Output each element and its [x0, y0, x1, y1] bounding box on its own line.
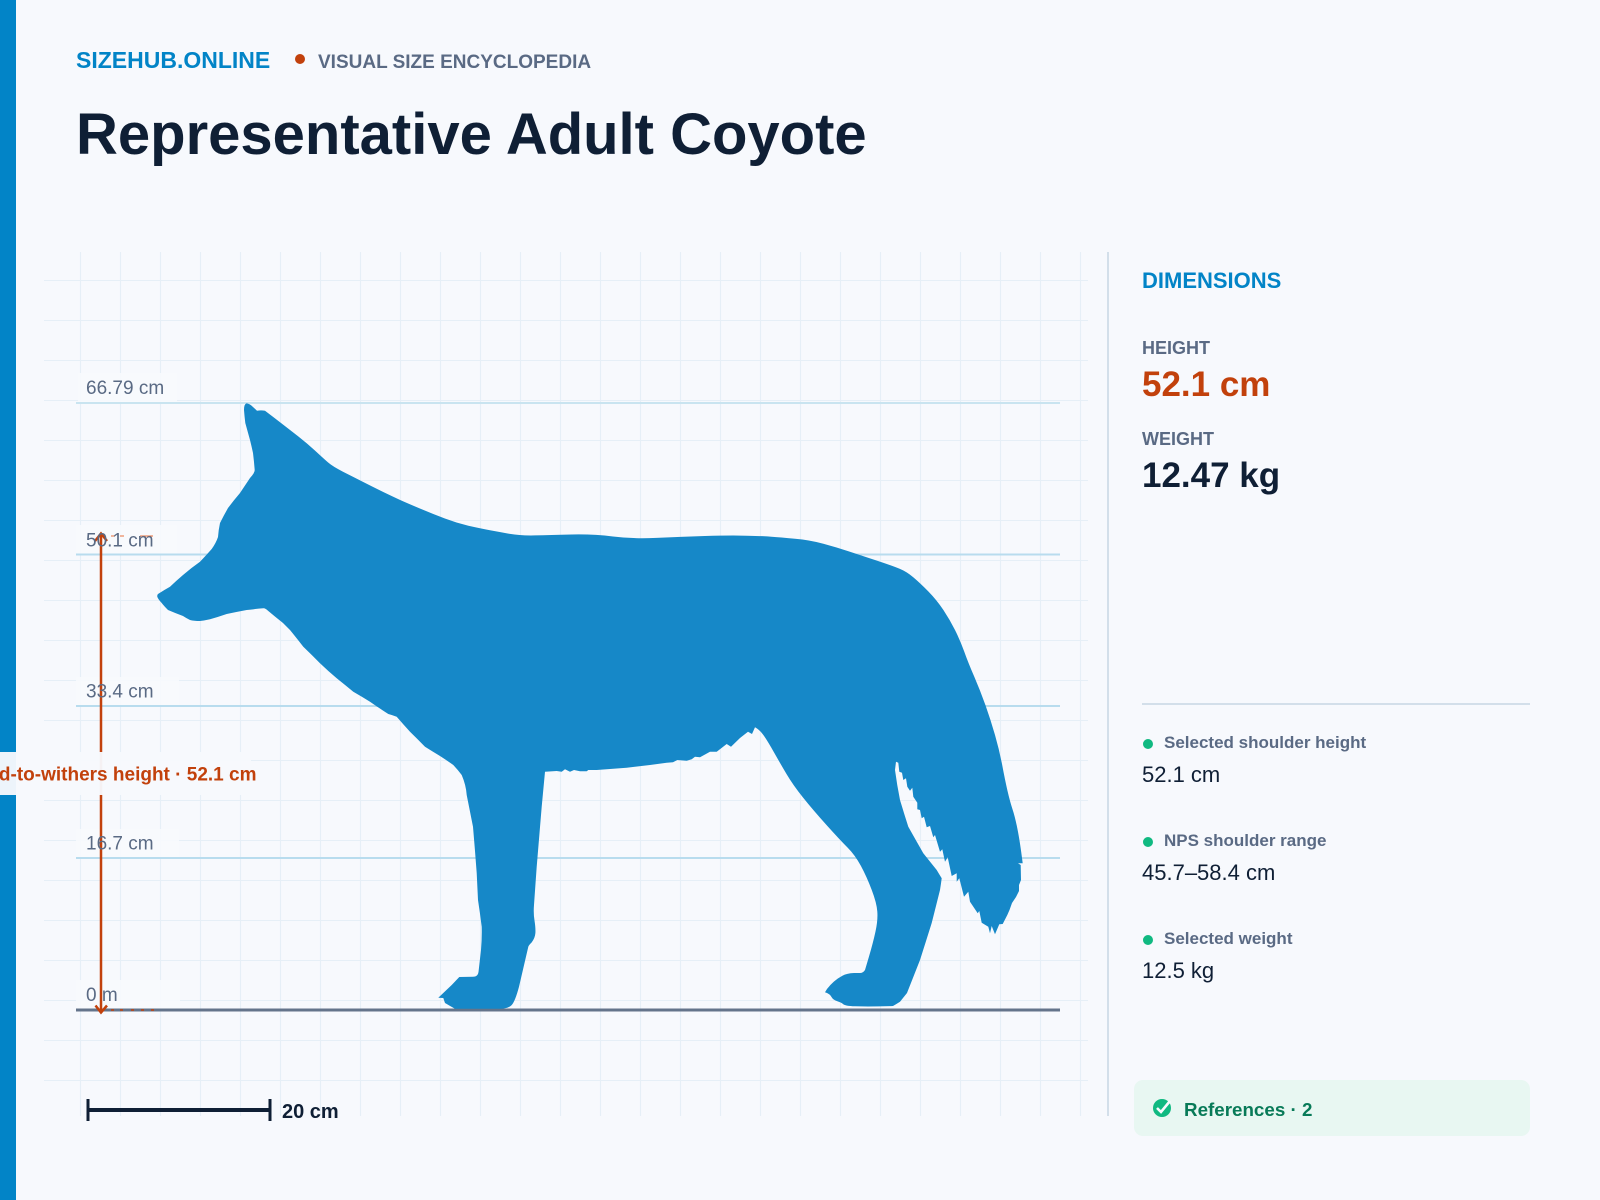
source: selected shoulder height: [1142, 733, 1366, 787]
brand separator dot: [295, 54, 305, 64]
weight metric: [1142, 429, 1280, 495]
chart: coyote size against height scale: [0, 252, 1088, 1123]
panel heading: DIMENSIONS: [1142, 268, 1281, 293]
weight metric: 12.47 kg: [1142, 456, 1280, 495]
icon: check circle: [1153, 1099, 1171, 1117]
scale bar 20 cm: [88, 1099, 339, 1123]
brand name: SIZEHUB.ONLINE: [76, 47, 270, 73]
height metric: 52.1 cm: [1142, 365, 1270, 404]
scale label 0 m: 0 m: [86, 985, 118, 1006]
height metric: HEIGHT: [1142, 338, 1210, 358]
source: selected shoulder height: 52.1 cm: [1142, 762, 1220, 787]
scale label 16.7 cm: 16.7 cm: [86, 834, 154, 854]
height measurement arrow: [95, 534, 107, 1012]
scale label 50.1 cm: 50.1 cm: [86, 530, 154, 552]
panel: dimensions: [1142, 268, 1530, 983]
source: selected weight: [1142, 929, 1293, 983]
tagline: VISUAL SIZE ENCYCLOPEDIA: [318, 52, 591, 73]
coyote silhouette: [157, 403, 1023, 1009]
source: NPS shoulder range: [1142, 831, 1326, 885]
source: selected shoulder height: Selected shoulder height: [1164, 733, 1366, 752]
height callout: [0, 752, 256, 795]
red reference dashes: [111, 535, 153, 537]
panel divider: [1107, 252, 1109, 1116]
source: selected weight: 12.5 kg: [1142, 958, 1214, 983]
references badge: [1134, 1080, 1530, 1136]
height metric: [1142, 338, 1270, 404]
source: NPS shoulder range: NPS shoulder range: [1164, 831, 1326, 850]
scale label 33.4 cm: 33.4 cm: [86, 682, 154, 702]
scale label 66.79 cm: 66.79 cm: [86, 378, 164, 399]
title: Representative Adult Coyote: [76, 102, 867, 167]
header: [76, 47, 867, 167]
scale bar 20 cm: 20 cm: [282, 1101, 339, 1123]
label backgrounds: [76, 373, 180, 1009]
references badge: References · 2: [1184, 1099, 1312, 1120]
source: NPS shoulder range: 45.7–58.4 cm: [1142, 860, 1275, 885]
left accent bar: [0, 0, 16, 1200]
source: selected weight: Selected weight: [1164, 929, 1293, 948]
weight metric: WEIGHT: [1142, 429, 1214, 449]
